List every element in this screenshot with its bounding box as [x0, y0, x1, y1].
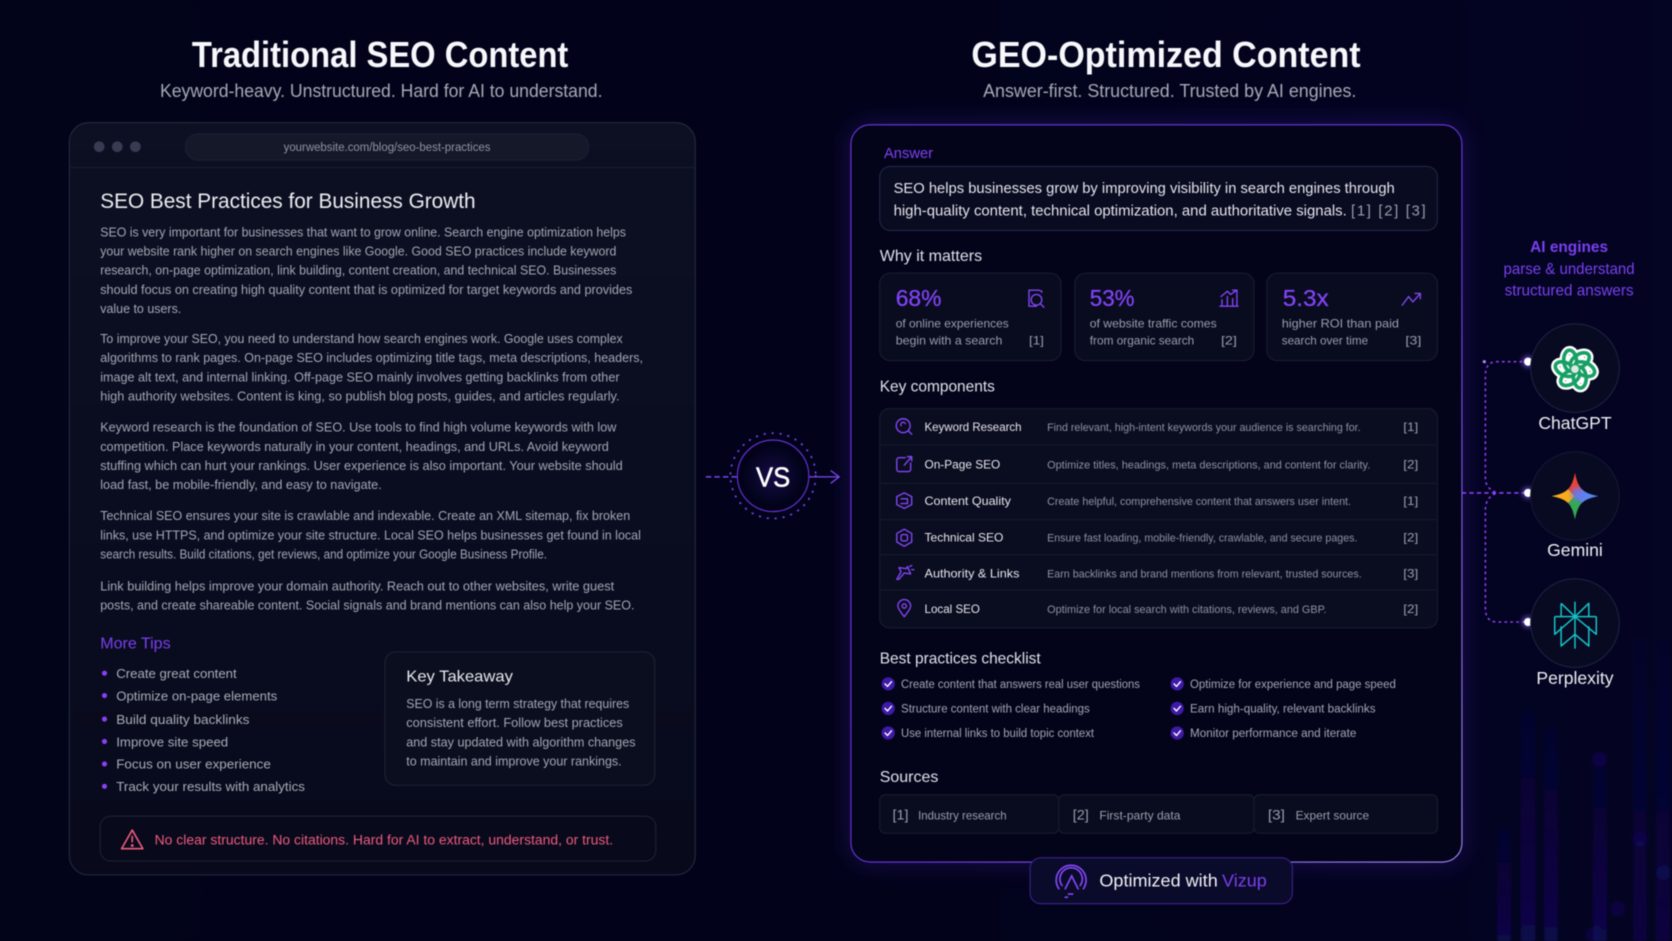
- row: keyword research: Keyword Research: [925, 420, 1022, 434]
- optimized with vizup badge: [1030, 858, 1292, 904]
- ai engines caption: AI engines: [1530, 239, 1608, 256]
- key takeaway card: Key Takeaway: [406, 669, 513, 686]
- stat card 53%: 53%: [1090, 285, 1135, 311]
- key takeaway card: to maintain and improve your rankings.: [406, 753, 622, 768]
- stat card 5.3x: [1267, 273, 1437, 361]
- paragraph 1: research, on-page optimization, link building, content creation, and technical SEO. Businesses: [100, 263, 617, 278]
- ai engines caption: structured answers: [1505, 283, 1634, 300]
- key components heading: Key components: [880, 379, 995, 396]
- row: authority and links: Authority & Links: [925, 567, 1019, 581]
- stat card 68%: [1]: [1029, 334, 1044, 348]
- checklist: Create content that answers real user questions: [901, 678, 1140, 691]
- stat card 53%: [1075, 273, 1254, 361]
- key takeaway card: SEO is a long term strategy that requires: [406, 696, 630, 711]
- row: on-page seo: Optimize titles, headings, meta descriptions, and content for clarity.: [1047, 459, 1370, 471]
- row: local seo: [2]: [1403, 602, 1418, 616]
- icon: document search: [1029, 290, 1044, 307]
- subtitle: geo: Answer-first. Structured. Trusted by AI engines.: [983, 81, 1356, 101]
- paragraph 2: high authority websites. Content is king, so publish blog posts, guides, and articles regularly.: [100, 389, 620, 404]
- answer box: [1] [2] [3]: [1351, 203, 1426, 220]
- ai engines caption: [1504, 239, 1635, 300]
- stat card 5.3x: higher ROI than paid: [1282, 317, 1399, 331]
- icon: vizup logo: [1056, 865, 1086, 897]
- row: local seo: Optimize for local search with citations, reviews, and GBP.: [1047, 604, 1327, 616]
- row: technical seo: [2]: [1403, 530, 1418, 544]
- icon: chatgpt knot: [1553, 349, 1597, 389]
- title: geo: GEO-Optimized Content: [971, 34, 1361, 75]
- sources row: First-party data: [1099, 808, 1181, 822]
- stat card 53%: of website traffic comes: [1090, 317, 1217, 331]
- title: traditional: Traditional SEO Content: [192, 34, 568, 75]
- key components table: [880, 409, 1437, 628]
- stat card 5.3x: [3]: [1405, 334, 1421, 348]
- stat card 5.3x: 5.3x: [1283, 285, 1329, 311]
- checklist: Optimize for experience and page speed: [1190, 678, 1396, 691]
- paragraph 1: your website rank higher on search engines like Google. Good SEO practices include keyword: [100, 244, 616, 259]
- tips list: Optimize on-page elements: [116, 688, 278, 703]
- row: technical seo: Technical SEO: [925, 530, 1003, 544]
- panel: geo-optimized content: [851, 125, 1462, 862]
- sources row: [2]: [1073, 806, 1089, 822]
- icon: gemini star: [1552, 473, 1598, 520]
- row: technical seo: [897, 529, 1418, 546]
- stat card 5.3x: search over time: [1282, 334, 1368, 348]
- engine: chatgpt: ChatGPT: [1538, 413, 1612, 433]
- row: keyword research: Find relevant, high-intent keywords your audience is searching for.: [1047, 422, 1361, 434]
- url bar: yourwebsite.com/blog/seo-best-practices: [284, 141, 491, 154]
- optimized with vizup badge: Vizup: [1222, 871, 1267, 891]
- engine: perplexity: Perplexity: [1536, 668, 1614, 688]
- icon: bar chart growth: [1220, 290, 1238, 306]
- paragraph 4: [100, 508, 641, 562]
- vs badge: [706, 433, 839, 519]
- answer box: SEO helps businesses grow by improving visibility in search engines through: [894, 180, 1395, 197]
- icon: warning triangle: [122, 830, 143, 849]
- paragraph 3: load fast, be mobile-friendly, and easy to navigate.: [100, 477, 382, 492]
- paragraph 3: stuffing which can hurt your rankings. User experience is also important. Your website should: [100, 458, 623, 473]
- answer box: high-quality content, technical optimization, and authoritative signals.: [894, 203, 1347, 220]
- tips list: [102, 666, 305, 794]
- row: on-page seo: [897, 457, 1418, 472]
- more tips heading: More Tips: [100, 636, 171, 653]
- key takeaway card: and stay updated with algorithm changes: [406, 734, 636, 749]
- warning callout: [100, 816, 656, 861]
- row: content quality: Content Quality: [925, 494, 1012, 508]
- row: content quality: Create helpful, comprehensive content that answers user intent.: [1047, 496, 1351, 508]
- paragraph 4: search results. Build citations, get reviews, and optimize your Google Business Profile.: [100, 547, 547, 562]
- row: local seo: [898, 600, 1418, 617]
- warning text: No clear structure. No citations. Hard for AI to extract, understand, or trust.: [155, 831, 613, 847]
- row: on-page seo: On-Page SEO: [925, 457, 1000, 471]
- engine: chatgpt: [1531, 324, 1619, 433]
- row: keyword research: [896, 419, 1418, 434]
- stat card 68%: of online experiences: [896, 317, 1009, 331]
- icon: perplexity mark: [1555, 602, 1596, 649]
- paragraph 4: Technical SEO ensures your site is crawlable and indexable. Create an XML sitemap, fix broken: [100, 508, 630, 523]
- paragraph 1: [100, 224, 633, 316]
- paragraph 1: should focus on creating high quality content that is optimized for target keywords and provides: [100, 282, 633, 297]
- paragraph 3: Keyword research is the foundation of SEO. Use tools to find high volume keywords with low: [100, 420, 617, 435]
- checklist heading: Best practices checklist: [880, 651, 1041, 668]
- paragraph 1: value to users.: [100, 301, 181, 316]
- engine: perplexity: [1531, 579, 1619, 688]
- sources row: [3]: [1268, 806, 1285, 822]
- checklist: Use internal links to build topic context: [901, 727, 1095, 740]
- tips list: Improve site speed: [116, 734, 228, 749]
- checklist: Monitor performance and iterate: [1190, 727, 1356, 740]
- window dots: [94, 141, 141, 152]
- paragraph 2: image alt text, and internal linking. Off-page SEO mainly involves getting backlinks from other: [100, 369, 620, 384]
- paragraph 2: [100, 331, 643, 404]
- tips list: Create great content: [116, 666, 237, 681]
- subtitle: traditional: Keyword-heavy. Unstructured. Hard for AI to understand.: [160, 81, 602, 101]
- answer label: Answer: [884, 146, 933, 162]
- stat card 53%: [2]: [1221, 334, 1237, 348]
- tips list: Focus on user experience: [116, 757, 271, 772]
- row: authority and links: [897, 565, 1418, 581]
- checklist: Earn high-quality, relevant backlinks: [1190, 703, 1376, 716]
- icon: trend line: [1402, 293, 1420, 305]
- url bar: [186, 134, 589, 160]
- article heading: SEO Best Practices for Business Growth: [100, 189, 476, 213]
- sources row: [880, 795, 1437, 833]
- ai engines caption: parse & understand: [1504, 261, 1635, 278]
- paragraph 2: To improve your SEO, you need to understand how search engines work. Google uses complex: [100, 331, 623, 346]
- paragraph 3: competition. Place keywords naturally in your content, headings, and URLs. Avoid keyword: [100, 439, 609, 454]
- connector lines: [1462, 356, 1533, 627]
- optimized with vizup badge: Optimized with: [1099, 871, 1218, 891]
- panel: traditional browser window: [69, 123, 695, 875]
- row: keyword research: [1]: [1403, 420, 1418, 434]
- paragraph 5: Link building helps improve your domain authority. Reach out to other websites, write guest: [100, 579, 615, 594]
- tips list: Build quality backlinks: [116, 712, 250, 727]
- engine: gemini: [1531, 452, 1619, 560]
- answer box: [880, 166, 1437, 230]
- paragraph 5: [100, 579, 634, 613]
- paragraph 5: posts, and create shareable content. Social signals and brand mentions can also help your SEO.: [100, 598, 634, 613]
- stat card 53%: from organic search: [1090, 334, 1194, 348]
- row: local seo: Local SEO: [925, 602, 980, 616]
- stat card 68%: begin with a search: [896, 334, 1002, 348]
- row: content quality: [1]: [1403, 494, 1418, 508]
- paragraph 1: SEO is very important for businesses that want to grow online. Search engine optimization helps: [100, 224, 626, 239]
- paragraph 3: [100, 420, 623, 492]
- tips list: Track your results with analytics: [116, 779, 305, 794]
- why it matters heading: Why it matters: [880, 248, 982, 265]
- sources row: Expert source: [1296, 808, 1370, 822]
- sources row: [1]: [893, 806, 909, 822]
- checklist: Structure content with clear headings: [901, 703, 1090, 716]
- row: content quality: [897, 493, 1418, 508]
- row: technical seo: Ensure fast loading, mobile-friendly, crawlable, and secure pages.: [1047, 532, 1357, 544]
- key takeaway card: [385, 652, 655, 785]
- sources row: Industry research: [918, 808, 1007, 822]
- decorative light bars: [1497, 640, 1671, 941]
- row: authority and links: [3]: [1403, 567, 1418, 581]
- stat card 68%: 68%: [896, 285, 942, 311]
- paragraph 4: links, use HTTPS, and optimize your site structure. Local SEO helps businesses get found in local: [100, 527, 641, 542]
- key takeaway card: consistent effort. Follow best practices: [406, 715, 623, 730]
- vs badge: VS: [756, 461, 790, 493]
- row: on-page seo: [2]: [1403, 457, 1418, 471]
- checklist: [882, 677, 1396, 740]
- engine: gemini: Gemini: [1547, 540, 1603, 560]
- paragraph 2: algorithms to rank pages. On-page SEO includes optimizing title tags, meta descriptions, headers,: [100, 350, 643, 365]
- sources heading: Sources: [880, 769, 938, 786]
- stat card 68%: [880, 273, 1061, 361]
- row: authority and links: Earn backlinks and brand mentions from relevant, trusted sources.: [1047, 569, 1362, 581]
